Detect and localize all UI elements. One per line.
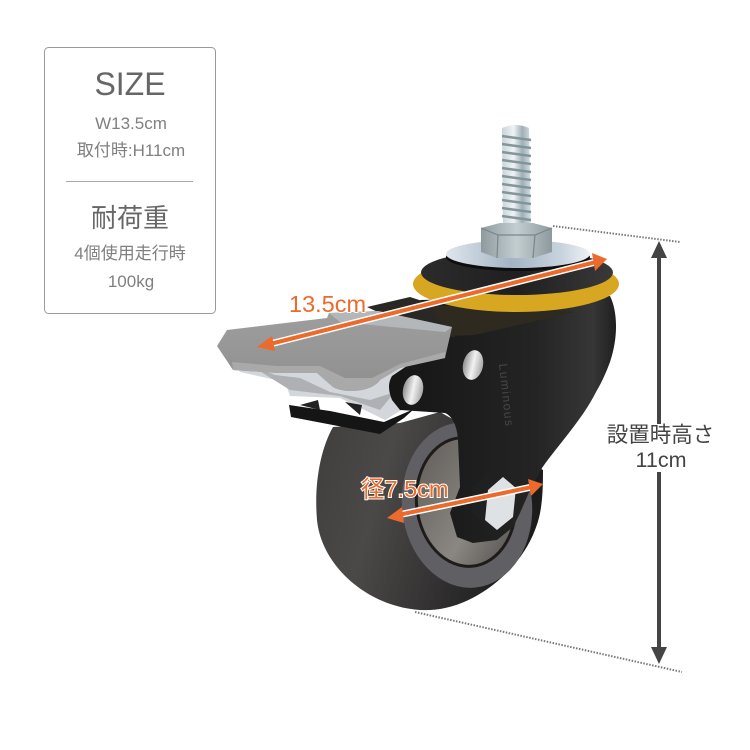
wheel hub ring [394, 416, 540, 594]
brake lever underside [225, 330, 445, 420]
brake bracket [289, 405, 414, 434]
arrow: width [257, 253, 607, 351]
bolt shaft [502, 125, 531, 230]
axle nut [472, 475, 503, 530]
label: wheel diameter: 径7.5cm [361, 476, 448, 502]
rivet: fork [460, 348, 486, 382]
yellow ring [413, 256, 619, 312]
panel: size and load [44, 48, 216, 314]
caster illustration [217, 125, 619, 610]
rivet: lever pivot [400, 373, 426, 407]
washer [446, 240, 590, 268]
text: load condition: 4個使用走行時 [74, 243, 186, 263]
stem arm [367, 297, 455, 338]
arrow: installed height [651, 241, 667, 664]
text: mounted height: 取付時:H11cm [77, 141, 185, 160]
arrow: wheel diameter [387, 479, 543, 523]
embossed brand mark: Luminous [496, 363, 517, 428]
washer shadow [446, 243, 590, 271]
label: width: 13.5cm [289, 291, 366, 317]
hex nut [481, 223, 552, 258]
brake lever [217, 311, 452, 391]
label: installed height [606, 423, 716, 472]
heading: SIZE: SIZE [94, 66, 166, 102]
caster fork body [389, 296, 616, 543]
label: installed height: 設置時高さ [607, 423, 714, 447]
label: installed height: 11cm [636, 448, 686, 472]
heading: load capacity: 耐荷重 [91, 203, 169, 233]
text: width: W13.5cm [95, 114, 167, 133]
dotted guide lines [415, 226, 682, 672]
text: load value: 100kg [108, 272, 154, 291]
housing dome [421, 250, 613, 295]
wheel tire [316, 412, 543, 610]
